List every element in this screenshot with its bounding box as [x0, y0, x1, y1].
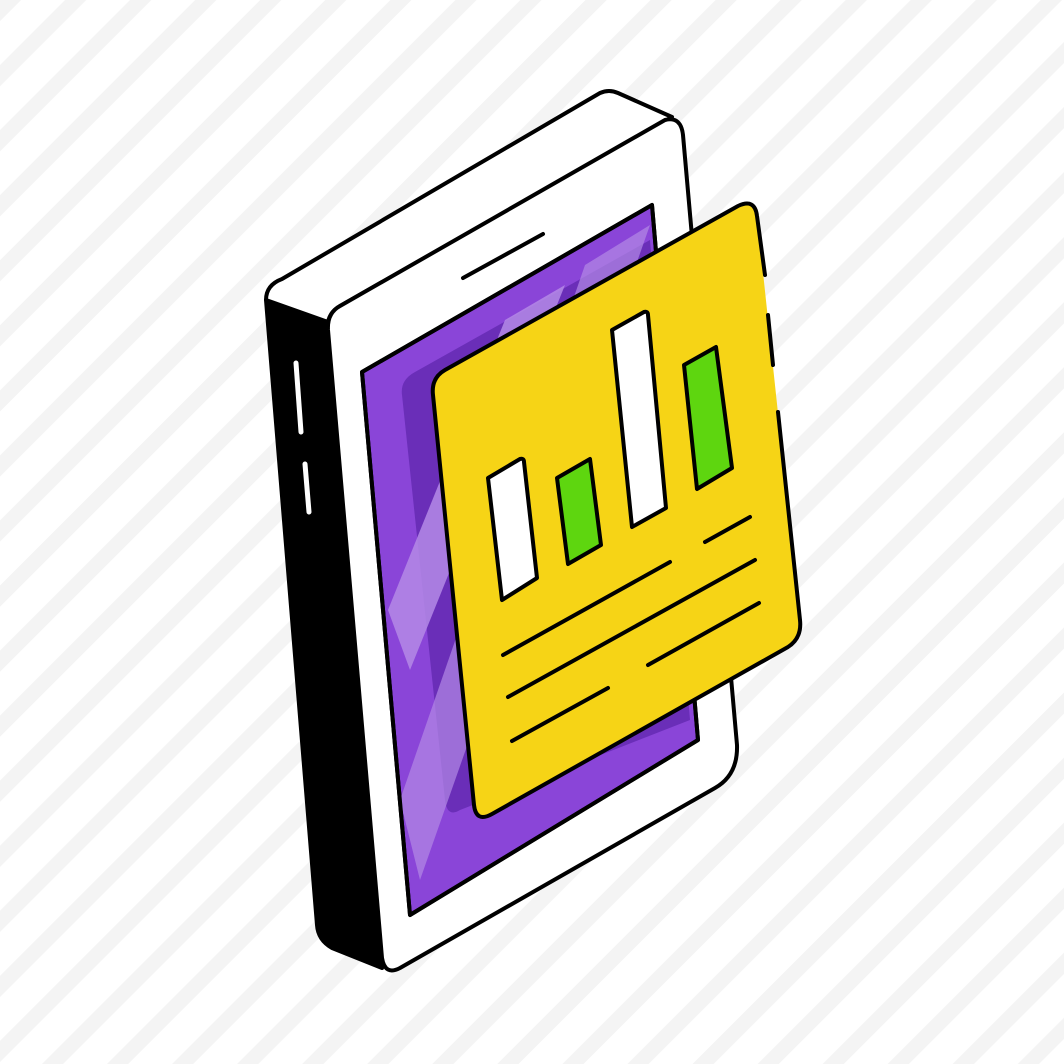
bar 1: [488, 459, 537, 600]
speaker: [463, 234, 543, 278]
chart card: [433, 204, 800, 817]
phone front face: [328, 119, 737, 970]
phone top edge: [266, 91, 672, 322]
screen: [362, 205, 698, 915]
text lines: [503, 562, 670, 655]
phone side (black): [266, 300, 382, 968]
phone: [266, 91, 737, 970]
bar 3: [612, 312, 666, 527]
bar 2: [557, 459, 601, 564]
bar 4: [684, 347, 732, 489]
side buttons: [296, 363, 301, 432]
